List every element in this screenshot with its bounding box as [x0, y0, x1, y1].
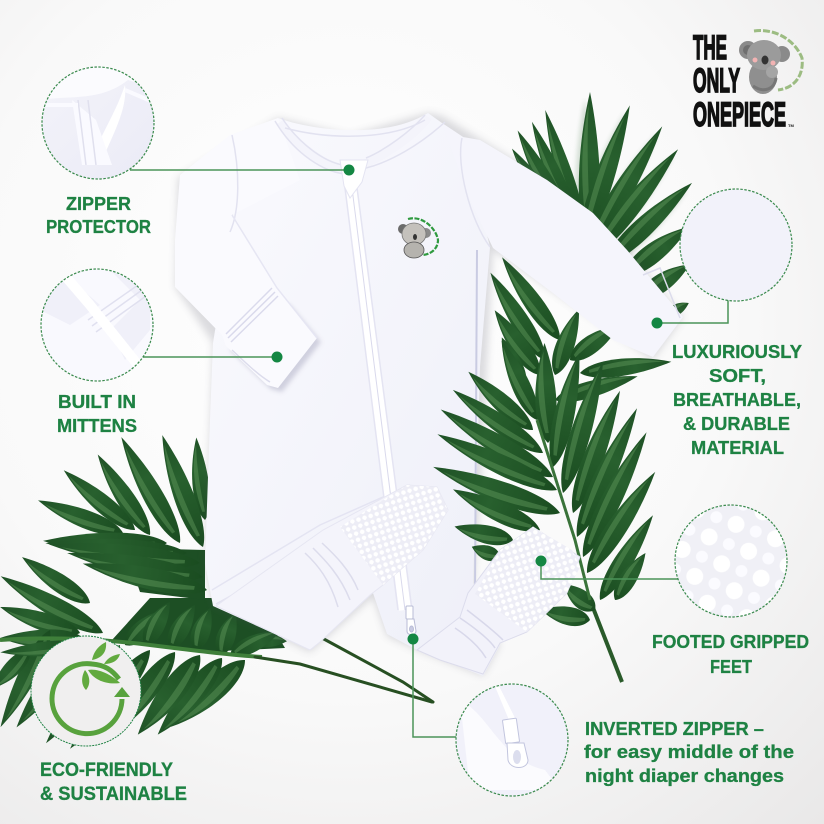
- label: MITTENS: [57, 416, 137, 436]
- dot: [344, 164, 354, 176]
- label: INVERTED ZIPPER –: [585, 719, 764, 739]
- callout: eco-friendly: [31, 636, 187, 805]
- label: PROTECTOR: [46, 217, 151, 237]
- embroidered koala: [398, 218, 438, 258]
- zipper protector: [340, 160, 368, 198]
- label: [46, 194, 151, 237]
- garment shadow: [175, 113, 683, 676]
- left sleeve shadow: [230, 304, 321, 392]
- icon: recycle ring: [52, 664, 122, 734]
- icon: leaves: [82, 642, 120, 690]
- eco badge: [31, 636, 141, 746]
- callout: footed gripped feet: [536, 505, 809, 677]
- garment: feet: [216, 485, 580, 674]
- logo wordmark: THE: [693, 29, 727, 67]
- detail circle: [680, 189, 792, 301]
- label: for easy middle of the: [584, 742, 794, 762]
- zipper: [344, 180, 412, 610]
- right foot: [417, 527, 580, 674]
- leader line: [541, 561, 678, 579]
- label: FOOTED GRIPPED: [652, 632, 809, 652]
- left foot gathers: [305, 543, 358, 607]
- logo leaves: [754, 31, 802, 90]
- callout: soft material: [652, 189, 802, 458]
- leader line: [657, 300, 728, 323]
- dot: [408, 634, 418, 644]
- logo wordmark: TM: [788, 123, 794, 128]
- left foot: [216, 485, 448, 650]
- label: [584, 719, 794, 786]
- label: SOFT,: [709, 366, 766, 386]
- callout: inverted zipper: [408, 634, 794, 796]
- leader line: [143, 356, 277, 358]
- right foot gathers: [455, 610, 503, 658]
- detail circle: [40, 269, 153, 381]
- label: [57, 392, 137, 436]
- leader line: [130, 169, 349, 171]
- stems: [255, 638, 433, 702]
- logo koala: [739, 40, 790, 94]
- zipper pull: [406, 606, 416, 635]
- label: [672, 342, 802, 458]
- dot: [536, 556, 546, 566]
- leader line: [413, 639, 457, 737]
- callout: built in mittens: [40, 269, 282, 436]
- callout: zipper protector: [40, 60, 354, 237]
- right sleeve: [442, 123, 683, 357]
- label: [40, 760, 187, 805]
- logo wordmark: [693, 29, 794, 134]
- label: & DURABLE: [683, 414, 790, 434]
- palm frond: centre right: [429, 337, 663, 682]
- detail circle: [456, 684, 568, 796]
- label: MATERIAL: [691, 438, 784, 458]
- logo wordmark: ONLY: [693, 62, 740, 100]
- icon: arrow: [114, 687, 130, 697]
- label: ZIPPER: [66, 194, 131, 214]
- label: ECO-FRIENDLY: [40, 760, 173, 781]
- label: BREATHABLE,: [673, 390, 801, 410]
- detail circle: [40, 60, 160, 179]
- label: LUXURIOUSLY: [672, 342, 802, 362]
- detail circle: [675, 505, 787, 617]
- label: & SUSTAINABLE: [40, 784, 187, 805]
- left foot grip: [340, 485, 448, 585]
- left sleeve: [175, 118, 317, 388]
- body: [205, 113, 500, 676]
- seams and neckband: [212, 115, 680, 604]
- right foot grip: [475, 527, 580, 632]
- label: [652, 632, 809, 677]
- label: night diaper changes: [585, 766, 784, 786]
- label: BUILT IN: [58, 392, 136, 412]
- palm frond: lower left: [0, 432, 433, 756]
- palm frond: upper right: [482, 92, 699, 407]
- logo: the only onepiece: [693, 29, 802, 134]
- dot: [652, 318, 662, 328]
- garment: sleepsuit upper: [175, 113, 683, 676]
- dot: [272, 352, 282, 362]
- label: FEET: [710, 657, 752, 677]
